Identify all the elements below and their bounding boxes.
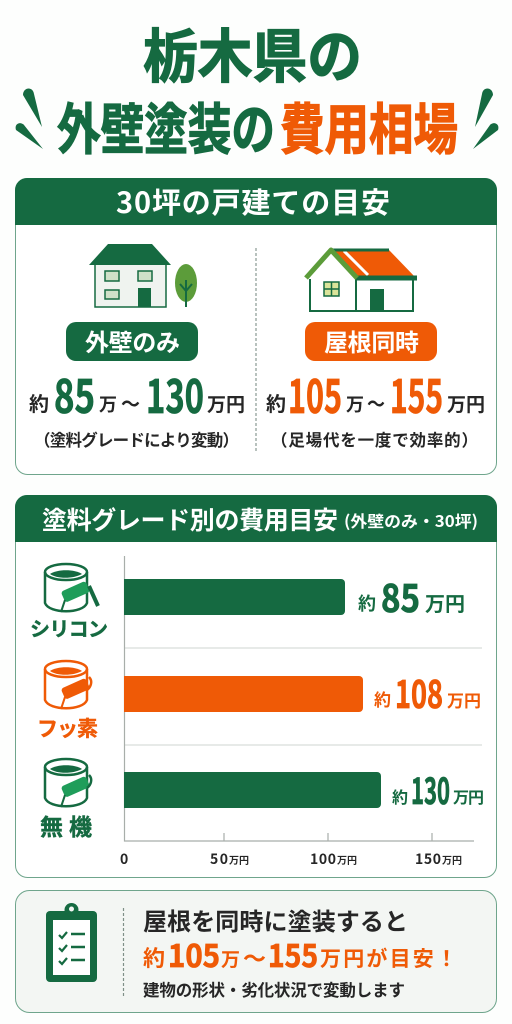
note: walls only: （塗料グレードにより変動） xyxy=(34,427,239,451)
price: with roof: ～ xyxy=(367,388,385,417)
axis labels: 万円 xyxy=(337,852,357,867)
callout line 2: 万 xyxy=(221,945,240,972)
callout line 2: 105 xyxy=(168,931,220,976)
value: inorganic: 万円 xyxy=(453,784,484,808)
value: fluorine: 108 xyxy=(395,664,443,719)
label: with roof: 屋根同時 xyxy=(324,323,419,358)
panel: cost by paint grade xyxy=(15,495,497,878)
price: with roof: 約 xyxy=(266,388,286,417)
icon: right accent marks xyxy=(473,88,498,149)
label: fluorine: フッ素 xyxy=(37,713,98,743)
heading: 30坪の戸建ての目安 xyxy=(116,180,390,222)
icon: house with orange roof xyxy=(306,250,417,311)
value: inorganic xyxy=(392,763,484,815)
label: inorganic: 無機 xyxy=(40,808,92,842)
panel: summary callout xyxy=(16,890,496,1012)
price: walls only xyxy=(29,361,245,427)
title: 外壁塗装の xyxy=(57,85,275,165)
value: silicone: 約 xyxy=(358,590,376,616)
callout line 2: 万円が目安！ xyxy=(320,943,457,973)
callout line 2: 約 xyxy=(143,941,165,973)
price: with roof: 105 xyxy=(288,361,342,427)
price: walls only: 130 xyxy=(146,361,204,427)
icon: clipboard checklist xyxy=(46,903,97,982)
panel header xyxy=(15,178,497,225)
value: silicone: 万円 xyxy=(425,588,465,617)
value: inorganic: 130 xyxy=(411,763,450,815)
label: silicone: シリコン xyxy=(30,613,108,642)
heading: 塗料グレード別の費用目安 xyxy=(42,501,338,537)
callout line 2: ～ xyxy=(243,939,266,974)
label: with roof xyxy=(305,322,437,361)
callout line 2: 155 xyxy=(268,931,318,976)
callout note: 建物の形状・劣化状況で変動します xyxy=(143,977,405,1001)
divider xyxy=(255,248,257,453)
bar chart xyxy=(120,556,484,869)
price: with roof: 155 xyxy=(390,361,443,427)
note: with roof: （足場代を一度で効率的） xyxy=(271,427,478,451)
bar: silicone xyxy=(124,579,345,615)
icon: house with wall highlight xyxy=(89,244,197,307)
panel header xyxy=(15,495,497,542)
icon: fluorine paint can xyxy=(45,661,91,709)
axis labels: 万円 xyxy=(229,852,249,867)
icon: silicone paint can xyxy=(45,564,98,612)
axis labels: 150 xyxy=(415,849,441,869)
price: walls only: 85 xyxy=(54,361,95,427)
bar: inorganic xyxy=(124,772,381,808)
callout line 1: 屋根を同時に塗装すると xyxy=(143,902,408,937)
axis labels xyxy=(120,849,462,869)
price: with roof: 万円 xyxy=(447,390,485,417)
axis labels: 100 xyxy=(310,849,336,869)
value: silicone xyxy=(358,568,465,623)
heading note: (外壁のみ・30坪) xyxy=(344,508,478,532)
label: walls only: 外壁のみ xyxy=(85,323,180,358)
price: with roof xyxy=(266,361,485,427)
price: with roof: 万 xyxy=(346,391,364,417)
divider xyxy=(122,908,124,996)
value: fluorine: 万円 xyxy=(447,687,481,712)
panel: 30 tsubo estimate xyxy=(15,178,497,474)
axis labels: 万円 xyxy=(442,852,462,867)
value: fluorine: 約 xyxy=(374,686,391,711)
icon: left accent marks xyxy=(16,88,43,149)
title: 栃木県の xyxy=(143,10,362,94)
price: walls only: ～ xyxy=(121,388,140,417)
axis labels: 0 xyxy=(120,849,128,869)
value: fluorine xyxy=(374,664,481,719)
title xyxy=(57,10,458,165)
price: walls only: 万円 xyxy=(207,390,245,417)
title: 費用相場 xyxy=(280,85,458,165)
axis labels: 50 xyxy=(210,849,228,869)
callout line 2 xyxy=(143,931,457,976)
value: inorganic: 約 xyxy=(392,784,408,808)
price: walls only: 万 xyxy=(99,391,117,417)
bar: fluorine xyxy=(124,676,363,712)
label: walls only xyxy=(66,322,198,361)
price: walls only: 約 xyxy=(29,388,49,417)
icon: inorganic paint can xyxy=(45,759,91,807)
value: silicone: 85 xyxy=(381,568,420,623)
